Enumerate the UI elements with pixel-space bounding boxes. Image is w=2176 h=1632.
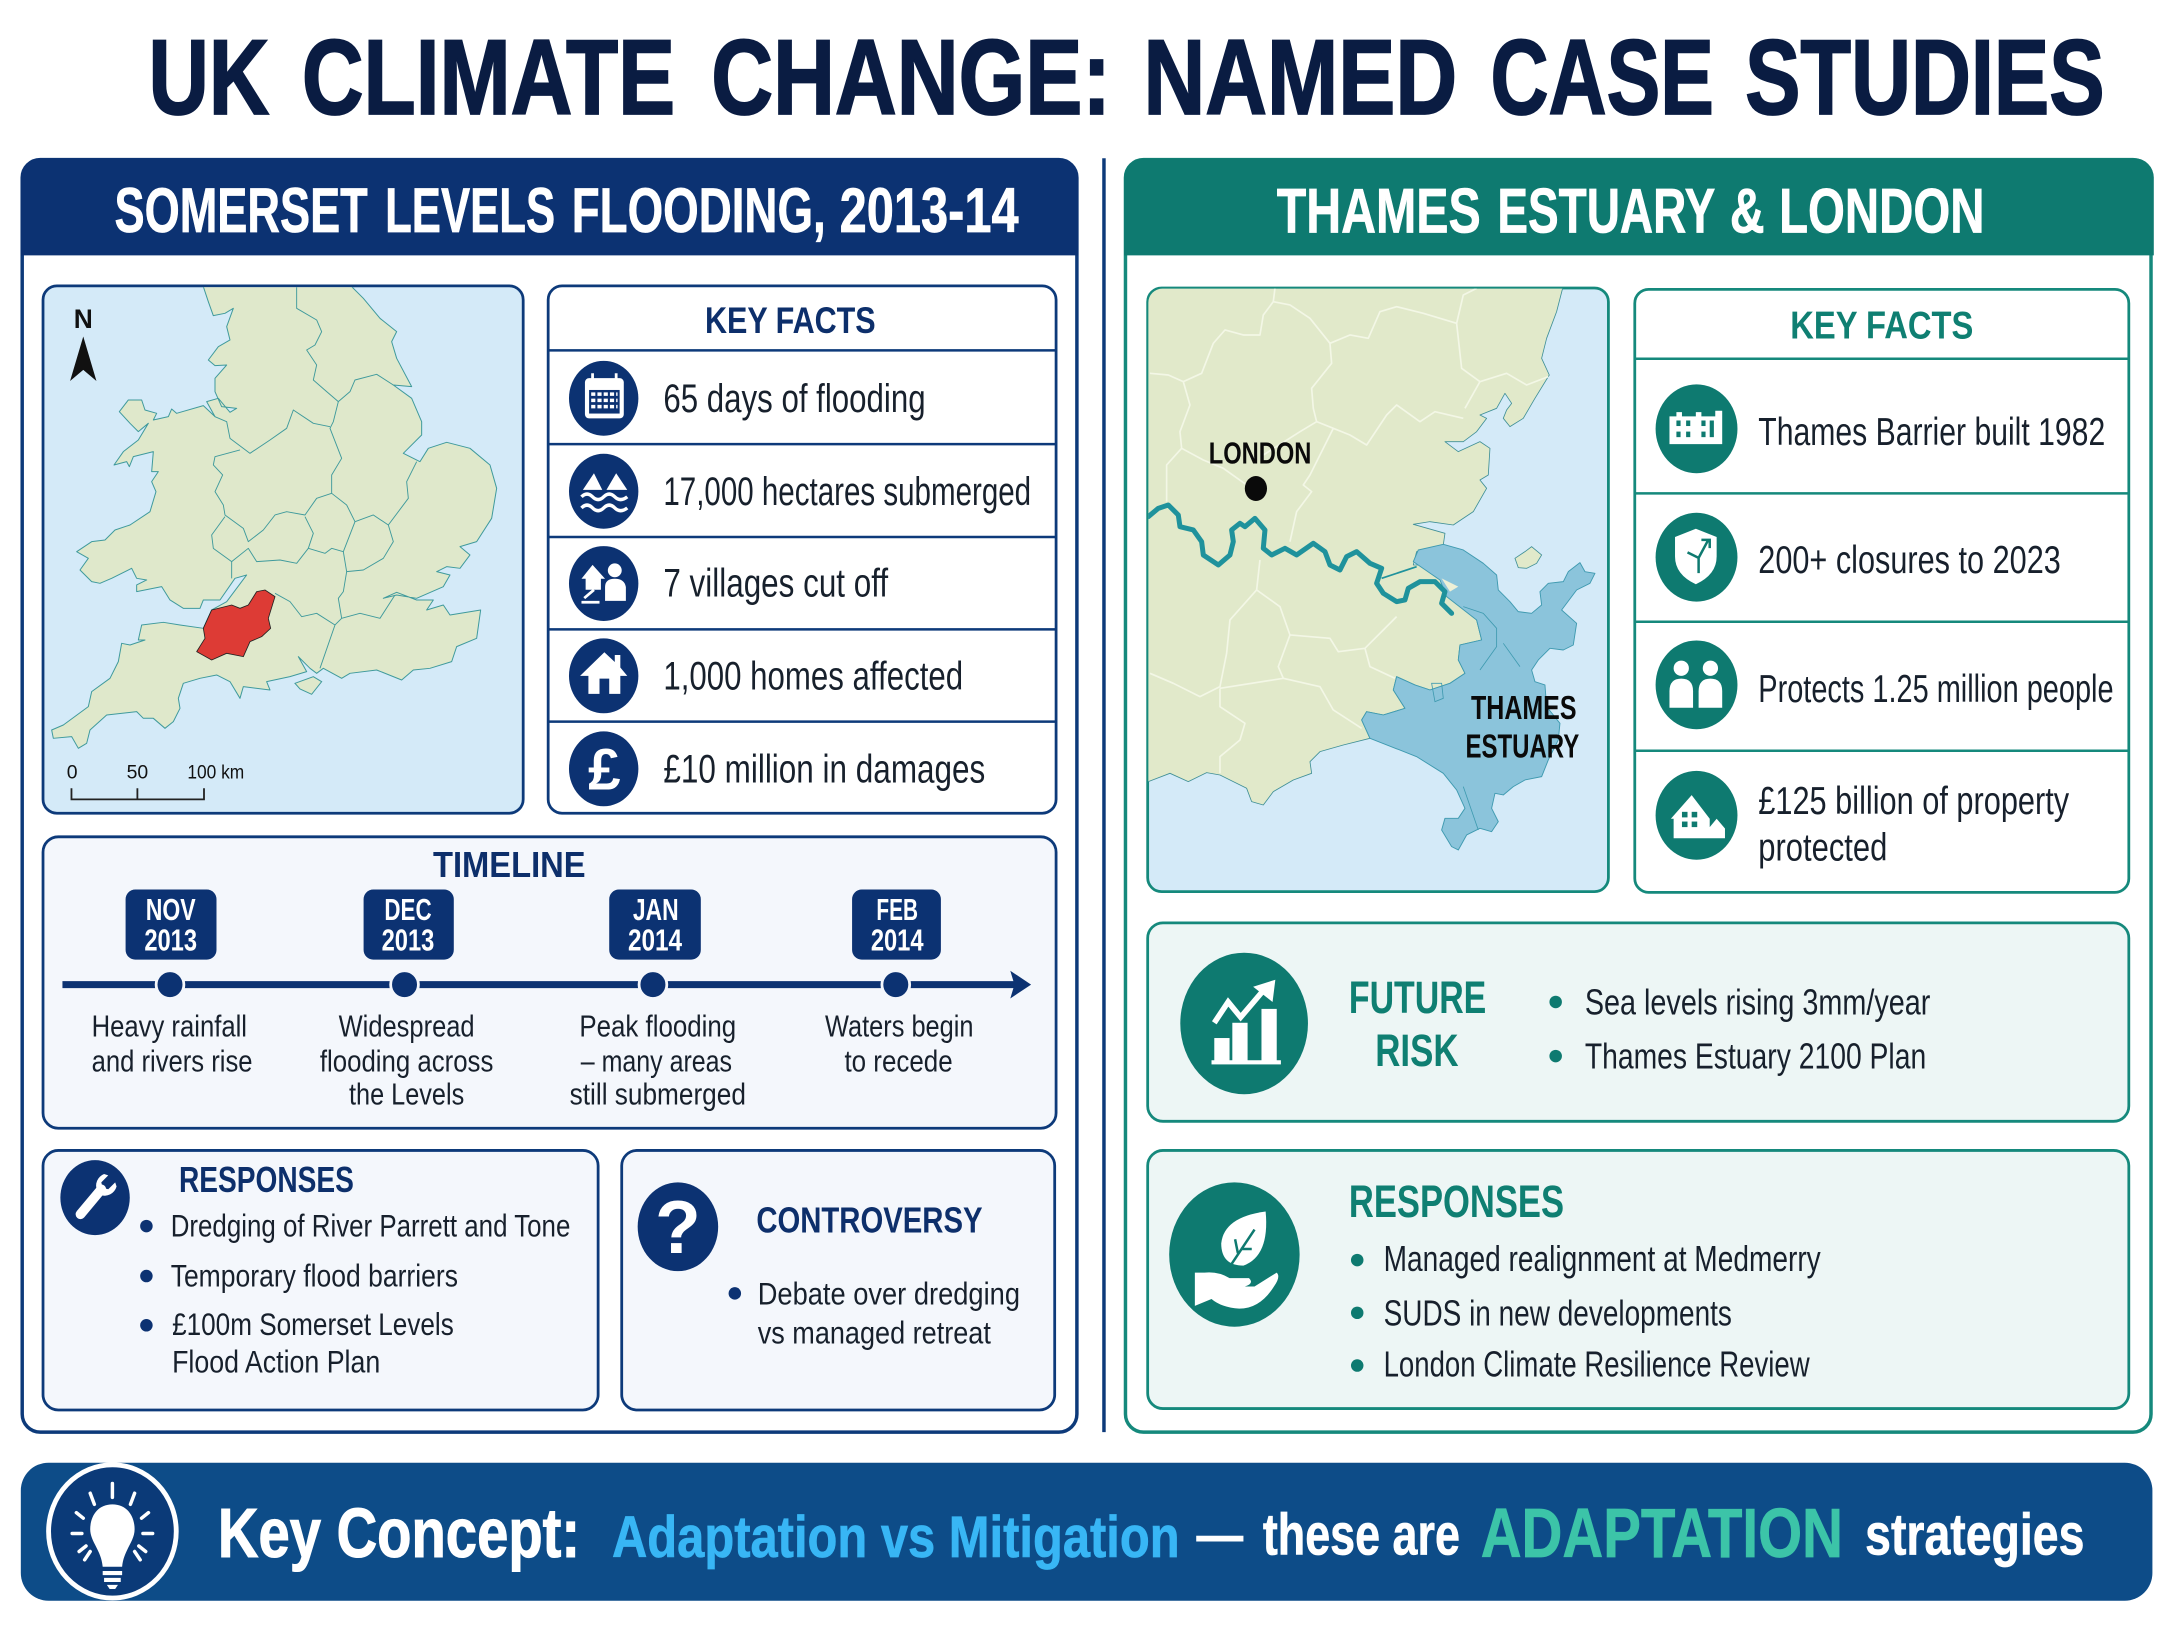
fact: property protected: protected — [1758, 826, 1887, 869]
concept text: strategies — [1865, 1502, 2084, 1567]
list: responses — [140, 1207, 570, 1379]
highlight: Somerset Levels — [197, 590, 275, 660]
label: Thames Estuary: ESTUARY — [1465, 729, 1579, 766]
scale bar: 0 — [67, 762, 78, 784]
title: CHANGE: — [711, 17, 1111, 137]
list: controversy — [729, 1275, 1020, 1350]
divider — [1103, 158, 1105, 1432]
event: Feb 2014: FEB — [876, 893, 918, 927]
icon: rising chart — [1180, 953, 1308, 1094]
heading: future risk: FUTURE — [1349, 972, 1486, 1023]
responses: Thames — [1148, 1150, 2129, 1409]
heading: key facts: KEY FACTS — [705, 299, 876, 341]
event: Dec 2013: flooding across — [320, 1044, 493, 1078]
concept text: Adaptation vs Mitigation — [612, 1505, 1180, 1570]
heading: future risk: RISK — [1375, 1025, 1459, 1076]
panel: Thames Estuary and London — [1124, 158, 2154, 1432]
title: UK — [148, 17, 269, 137]
panel header: Somerset: 2013-14 — [840, 176, 1019, 246]
concept text — [218, 1494, 2084, 1572]
fact: 65 days — [569, 361, 926, 436]
key facts: Thames — [1635, 289, 2129, 892]
list: responses: Flood Action Plan — [172, 1343, 380, 1379]
concept text: — — [1196, 1502, 1244, 1567]
icon: light bulb — [49, 1465, 176, 1598]
estuary zone — [1362, 544, 1595, 850]
fact: closures — [1656, 513, 2061, 602]
list: responses: Dredging of River Parrett and Tone — [171, 1207, 570, 1243]
responses: Somerset — [43, 1150, 598, 1410]
heading: responses: RESPONSES — [1349, 1176, 1564, 1227]
fact: closures: 200+ closures to 2023 — [1758, 539, 2061, 582]
event: Feb 2014: Waters begin — [825, 1010, 974, 1044]
north arrow — [70, 304, 96, 381]
list: future risk — [1549, 981, 1930, 1077]
timeline — [43, 837, 1056, 1128]
panel: Somerset Levels flooding — [21, 158, 1078, 1432]
timeline axis — [62, 971, 1031, 998]
panel header: Somerset: LEVELS — [385, 176, 555, 246]
panel header: Thames: LONDON — [1779, 176, 1984, 246]
heading: controversy: CONTROVERSY — [756, 1199, 983, 1240]
fact: 7 villages: 7 villages cut off — [663, 561, 889, 606]
event: Dec 2013: the Levels — [349, 1078, 464, 1112]
fact: barrier — [1656, 384, 2105, 473]
event: Jan 2014: Peak flooding — [579, 1010, 736, 1044]
label: Thames Estuary: THAMES — [1471, 690, 1576, 727]
fact: 10 million: £10 million in damages — [663, 747, 985, 792]
fact: people protected — [1656, 640, 2114, 729]
event: Feb 2014 — [825, 890, 974, 1078]
event: Dec 2013 — [320, 890, 493, 1112]
title: CASE — [1490, 17, 1714, 137]
heading: responses: RESPONSES — [179, 1159, 354, 1200]
event: Jan 2014: still submerged — [570, 1078, 746, 1112]
fact: property protected: £125 billion of property — [1758, 780, 2070, 823]
event: Nov 2013: NOV — [146, 893, 196, 927]
event: Jan 2014: – many areas — [581, 1044, 732, 1078]
icon: question mark — [638, 1182, 718, 1271]
list: responses: £100m Somerset Levels — [172, 1306, 454, 1342]
controversy — [622, 1150, 1055, 1410]
list: future risk: Thames Estuary 2100 Plan — [1585, 1036, 1926, 1077]
panel header: Thames: & — [1730, 176, 1765, 246]
list: responses: London Climate Resilience Review — [1384, 1344, 1810, 1385]
event: Nov 2013: 2013 — [144, 924, 197, 958]
heading: future risk — [1349, 972, 1486, 1076]
fact: 10 million — [569, 731, 985, 806]
panel header: Somerset — [21, 158, 1078, 255]
panel header: Somerset: SOMERSET — [114, 176, 368, 246]
event: Jan 2014: JAN — [633, 893, 679, 927]
future risk — [1148, 923, 2129, 1121]
event: Dec 2013: DEC — [384, 893, 432, 927]
map: Thames Estuary — [1140, 282, 1608, 892]
title — [148, 17, 2105, 137]
list: controversy: Debate over dredging — [758, 1275, 1020, 1311]
scale bar — [67, 762, 244, 799]
scale bar: 100 km — [187, 762, 244, 784]
scale bar: 50 — [127, 762, 148, 784]
panel header: Thames: ESTUARY — [1497, 176, 1715, 246]
heading: timeline: TIMELINE — [433, 844, 586, 885]
list: controversy: vs managed retreat — [758, 1314, 991, 1350]
list: future risk: Sea levels rising 3mm/year — [1585, 981, 1930, 1022]
event: Jan 2014 — [570, 890, 746, 1112]
label: London: LONDON — [1209, 437, 1311, 471]
event: Nov 2013: and rivers rise — [92, 1044, 253, 1078]
fact: 1,000 homes: 1,000 homes affected — [663, 654, 963, 699]
icon: wrench — [60, 1160, 130, 1235]
key facts: Somerset — [548, 286, 1056, 813]
heading: key facts: KEY FACTS — [1790, 305, 1973, 348]
list: responses: Temporary flood barriers — [171, 1257, 458, 1293]
title: NAMED — [1144, 17, 1457, 137]
list: responses: SUDS in new developments — [1384, 1292, 1732, 1333]
north arrow: N — [74, 304, 93, 334]
icon: question mark: ? — [655, 1185, 701, 1269]
list: responses: Managed realignment at Medmerry — [1384, 1238, 1821, 1279]
event: Feb 2014: to recede — [844, 1044, 953, 1078]
concept text: Key Concept: — [218, 1494, 580, 1572]
panel header: Somerset: FLOODING, — [572, 176, 826, 246]
label: London — [1209, 437, 1311, 501]
key concept banner — [21, 1463, 2152, 1601]
list: responses — [1351, 1238, 1821, 1385]
panel header: Thames — [1124, 158, 2154, 255]
river Thames — [1148, 505, 1452, 613]
map: England and Wales with Somerset highlighted — [43, 282, 523, 813]
event: Dec 2013: Widespread — [339, 1010, 475, 1044]
icon: hand holding leaf — [1169, 1182, 1300, 1327]
label: Thames Estuary — [1465, 690, 1579, 766]
title: CLIMATE — [302, 17, 675, 137]
fact: property protected — [1656, 771, 2070, 869]
fact: 10 million: £ — [588, 738, 621, 803]
fact: 65 days: 65 days of flooding — [663, 376, 926, 421]
concept text: ADAPTATION — [1481, 1494, 1843, 1572]
concept text: these are — [1263, 1502, 1460, 1567]
fact: 1,000 homes — [569, 638, 963, 713]
fact: 7 villages — [569, 546, 889, 621]
event: Nov 2013 — [92, 890, 253, 1078]
panel header: Thames: THAMES — [1277, 176, 1481, 246]
event: Nov 2013: Heavy rainfall — [92, 1010, 247, 1044]
event: Jan 2014: 2014 — [628, 924, 682, 958]
fact: 17,000 hectares: 17,000 hectares submerged — [663, 469, 1031, 514]
event: Feb 2014: 2014 — [871, 924, 924, 958]
event: Dec 2013: 2013 — [382, 924, 434, 958]
fact: 17,000 hectares — [569, 454, 1031, 529]
